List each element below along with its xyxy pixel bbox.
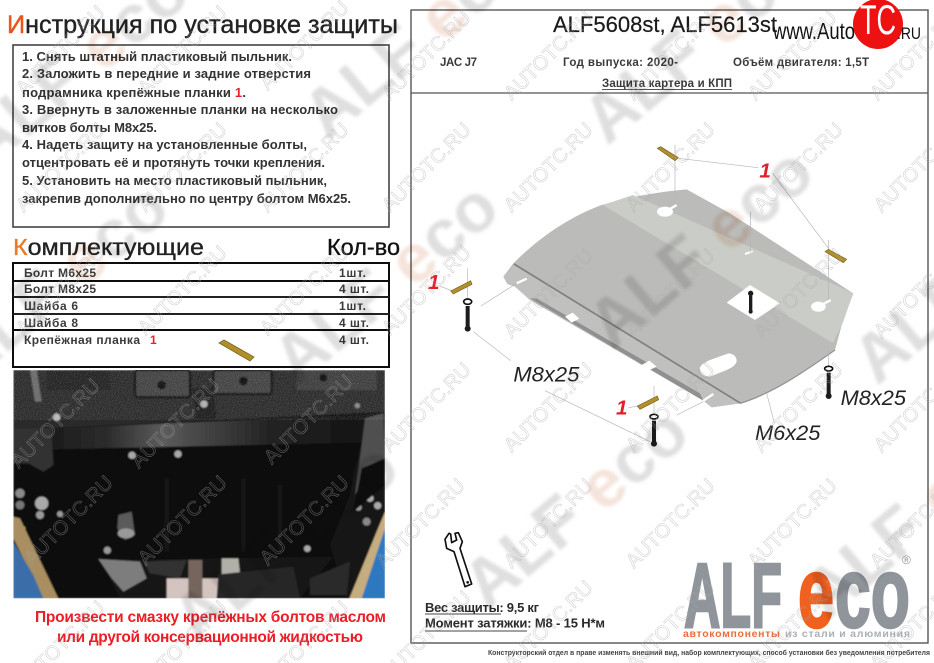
watermark: AUTOTC.RU: AUTOTC.RU [12, 119, 110, 217]
size labels: M8x25 [513, 363, 579, 387]
logo: ALF eco: ® [902, 553, 911, 567]
logo: ALF eco: ALF [684, 545, 782, 647]
photo: protection installed under the car [13, 370, 385, 598]
watermark: AUTOTC.RU: AUTOTC.RU [500, 119, 598, 217]
callout numbers [428, 159, 771, 420]
table: components list: Шайба 6 [24, 299, 78, 313]
panel: installation steps: закрепив дополнительно по центру болтом М6х25. [22, 191, 351, 206]
panel: installation steps: 1. Снять штатный пластиковый пыльник. [22, 49, 292, 64]
panel: installation steps: 4. Надеть защиту на установленные болты, [22, 137, 307, 152]
table: components list: 1шт. [339, 266, 366, 280]
watermark: AUTOTC.RU: AUTOTC.RU [260, 371, 358, 469]
warning: lubricate bolts [35, 609, 386, 646]
panel: installation steps: витков болты М8х25. [22, 120, 157, 135]
panel: installation steps: 5. Установить на место пластиковый пыльник, [22, 173, 327, 188]
panel: installation steps: 3. Ввернуть в заложенные планки на несколько [22, 102, 338, 117]
heading: part numbers: ALF5608st, ALF5613st [553, 12, 777, 37]
table: components list: 1 [150, 333, 157, 347]
watermark: ALF eco: ALF eco [158, 427, 412, 658]
protection weight and torque: Момент затяжки: М8 - 15 Н*м [425, 616, 605, 630]
watermark: AUTOTC.RU: AUTOTC.RU [744, 475, 842, 573]
vehicle details: Год выпуска: 2020- [563, 57, 678, 69]
watermark: AUTOTC.RU: AUTOTC.RU [134, 119, 232, 217]
plate [503, 189, 853, 407]
watermark: AUTOTC.RU: AUTOTC.RU [744, 7, 842, 105]
part name: Защита картера и КПП [602, 78, 732, 90]
watermark: AUTOTC.RU: AUTOTC.RU [378, 359, 476, 457]
callout numbers: 1 [428, 271, 439, 294]
watermark: AUTOTC.RU: AUTOTC.RU [622, 475, 720, 573]
watermark: AUTOTC.RU: AUTOTC.RU [127, 375, 225, 473]
size labels: M6x25 [755, 421, 820, 445]
vehicle details: Объём двигателя: 1,5Т [733, 57, 869, 69]
watermark: AUTOTC.RU: AUTOTC.RU [750, 119, 848, 217]
leader lines [439, 145, 832, 442]
logo: AutoTC website badge: www.Auto [772, 18, 855, 44]
watermark: AUTOTC.RU: AUTOTC.RU [378, 242, 476, 340]
panel: part diagram frame [411, 10, 928, 643]
watermark: AUTOTC.RU: AUTOTC.RU [256, 472, 354, 570]
table: components list: 4 шт. [339, 282, 369, 296]
watermark: AUTOTC.RU: AUTOTC.RU [256, 119, 354, 217]
icon: wrench [445, 533, 472, 587]
table: components list: Болт М6х25 [24, 266, 96, 280]
logo: AutoTC website badge [772, 0, 921, 49]
heading: components: Комплектующие [13, 234, 204, 260]
watermark: AUTOTC.RU: AUTOTC.RU [372, 475, 470, 573]
table: components list: Шайба 8 [24, 316, 78, 330]
panel: installation steps: отцентровать её и протянуть точки крепления. [22, 155, 325, 170]
size labels: M8x25 [841, 386, 906, 410]
watermark: AUTOTC.RU: AUTOTC.RU [134, 2, 232, 100]
heading: quantity: Кол-во [327, 234, 400, 260]
watermark: AUTOTC.RU: AUTOTC.RU [256, 242, 354, 340]
watermark: AUTOTC.RU: AUTOTC.RU [134, 242, 232, 340]
watermark: AUTOTC.RU: AUTOTC.RU [750, 245, 848, 343]
table: components list: 1шт. [339, 299, 366, 313]
watermark: ALF eco: ALF eco [448, 392, 702, 623]
watermark: ALF eco: ALF eco [258, 167, 512, 398]
watermark: AUTOTC.RU: AUTOTC.RU [750, 359, 848, 457]
watermark: AUTOTC.RU: AUTOTC.RU [500, 7, 598, 105]
protection weight and torque: Вес защиты: 9,5 кг [425, 600, 540, 615]
size labels [513, 363, 906, 445]
protection weight and torque [425, 600, 605, 631]
panel: installation steps: 2. Заложить в передние и задние отверстия [22, 66, 311, 81]
callout numbers: 1 [616, 397, 627, 420]
watermark: AUTOTC.RU: AUTOTC.RU [12, 2, 110, 100]
diagram: skid plate with fasteners [428, 145, 906, 447]
logo: AutoTC website badge: .RU [897, 24, 921, 43]
vehicle details: JAC J7 [440, 57, 477, 69]
vehicle details [440, 57, 869, 69]
watermark: AUTOTC.RU: AUTOTC.RU [134, 472, 232, 570]
watermark: AUTOTC.RU: AUTOTC.RU [500, 475, 598, 573]
logo: ALF eco: из стали и алюминия [785, 628, 910, 640]
panel: installation steps: подрамника крепёжные планки 1. [22, 85, 246, 100]
watermark: AUTOTC.RU: AUTOTC.RU [378, 119, 476, 217]
bolts [464, 291, 833, 447]
watermark: ALF eco: ALF eco [573, 132, 827, 363]
mounting strips [451, 147, 847, 409]
table: components list: Болт М8х25 [24, 282, 96, 296]
watermark: AUTOTC.RU: AUTOTC.RU [622, 119, 720, 217]
watermark: AUTOTC.RU: AUTOTC.RU [622, 7, 720, 105]
watermark: AUTOTC.RU: AUTOTC.RU [622, 359, 720, 457]
logo: ALF eco: автокомпоненты [683, 628, 780, 640]
watermark: AUTOTC.RU: AUTOTC.RU [7, 375, 105, 473]
table: components list [13, 263, 389, 367]
panel: installation steps [13, 45, 389, 227]
callout numbers: 1 [759, 159, 771, 182]
warning: lubricate bolts: или другой консервационной жидкостью [57, 629, 363, 646]
table: components list: Крепёжная планка [24, 333, 140, 347]
table: components list: 4 шт. [339, 333, 369, 347]
watermark: AUTOTC.RU: AUTOTC.RU [500, 245, 598, 343]
watermark: AUTOTC.RU: AUTOTC.RU [622, 245, 720, 343]
warning: lubricate bolts: Произвести смазку крепёжных болтов маслом [35, 609, 386, 626]
table: components list: 4 шт. [339, 316, 369, 330]
watermark: AUTOTC.RU: AUTOTC.RU [20, 472, 118, 570]
logo: ALF eco: e [798, 537, 834, 649]
watermark: AUTOTC.RU: AUTOTC.RU [12, 242, 110, 340]
title: installation instructions: Инструкция по установке защиты [7, 11, 398, 39]
watermark: AUTOTC.RU: AUTOTC.RU [378, 7, 476, 105]
watermark: AUTOTC.RU: AUTOTC.RU [500, 359, 598, 457]
